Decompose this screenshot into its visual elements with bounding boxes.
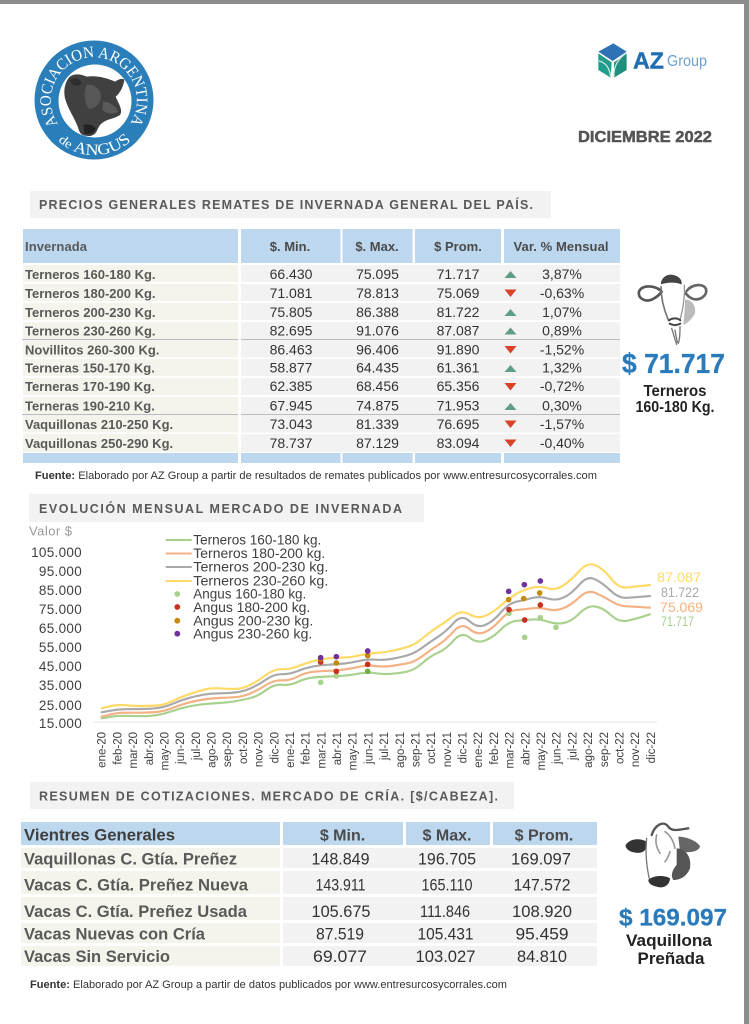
row: Vaquillonas 210-250: 73.043 <box>270 416 313 432</box>
table header: $. Min. <box>270 239 310 254</box>
heading: precios generales: PRECIOS GENERALES REMATES DE INVERNADA GENERAL DEL PAÍS. <box>39 197 533 212</box>
x axis labels: dic-22 <box>646 732 658 763</box>
x axis labels: jul-21 <box>379 732 391 761</box>
x axis labels: oct-21 <box>426 732 438 764</box>
x axis labels: may-20 <box>160 732 172 770</box>
legend: Terneros 160-180 kg. <box>193 532 321 548</box>
row: Terneros 200-230 <box>25 304 582 320</box>
row: Vaquillonas 250-290: 83.094 <box>437 435 480 451</box>
row: Terneras 170-190: Terneras 170-190 Kg. <box>25 379 155 394</box>
row: Terneros 230-260 <box>25 322 582 338</box>
row: Terneros 180-200: -0,63% <box>540 285 584 301</box>
x axis labels: mar-21 <box>316 732 328 768</box>
row: Vacas Nuevas con Cría: 105.431 <box>418 926 474 944</box>
row: Terneros 230-260: 82.695 <box>270 322 313 338</box>
callout: vaquillona price: Vaquillona <box>626 932 713 950</box>
row: Terneros 180-200: 75.069 <box>437 285 480 301</box>
x axis labels: feb-21 <box>301 732 313 765</box>
x axis labels: ene-20 <box>97 732 109 768</box>
row: Terneros 200-230: 1,07% <box>542 304 582 320</box>
row: Novillitos 260-300: Novillitos 260-300 Kg. <box>25 342 159 358</box>
line chart: monthly evolution <box>29 524 703 770</box>
callout: terneros price: $ 71.717 <box>622 348 725 379</box>
table header <box>23 229 620 263</box>
row: Terneras 150-170: 1,32% <box>542 360 582 376</box>
row: Vaquillonas C. Gtía. Preñez: Vaquillonas C. Gtía. Preñez <box>24 850 237 868</box>
row: Vacas Nuevas con Cría: 95.459 <box>516 926 568 944</box>
row: Vacas C. Gtía. Preñez Usada: 108.920 <box>512 903 572 921</box>
row: Terneros 160-180: Terneros 160-180 Kg. <box>25 267 156 282</box>
icon: calf head <box>639 275 706 344</box>
row: Novillitos 260-300: 91.890 <box>437 342 480 358</box>
x axis labels: dic-20 <box>269 732 281 763</box>
x axis labels: oct-22 <box>614 732 626 764</box>
row: Vacas Sin Servicio: 84.810 <box>517 948 567 966</box>
row: Vacas C. Gtía. Preñez Usada: Vacas C. Gtía. Preñez Usada <box>24 903 248 921</box>
row: Terneros 230-260: 87.087 <box>437 322 480 338</box>
table: vientres generales <box>21 822 597 966</box>
row: Terneras 170-190: 65.356 <box>437 378 480 394</box>
x axis labels: sep-21 <box>410 732 422 767</box>
row: Vaquillonas 250-290: 78.737 <box>270 435 313 451</box>
x axis labels: ago-21 <box>395 732 407 768</box>
row: Terneros 160-180: 66.430 <box>270 266 313 282</box>
end value labels: 87.087 <box>657 569 701 585</box>
row: Vacas Sin Servicio: Vacas Sin Servicio <box>24 948 170 966</box>
end value labels: 81.722 <box>661 584 699 600</box>
y axis labels: 45.000 <box>39 659 82 674</box>
row: Vacas Nuevas con Cría: 87.519 <box>316 926 364 944</box>
row: Terneros 160-180 <box>25 266 582 282</box>
source note 1: Fuente: Elaborado por AZ Group a partir de resultados de remates publicados por www.entresurcosycorrales.com <box>35 470 597 482</box>
row: Vacas C. Gtía. Preñez Nueva: 147.572 <box>514 876 570 894</box>
table header <box>21 822 597 845</box>
end value labels <box>657 569 703 629</box>
end value labels: 75.069 <box>660 599 703 615</box>
row: Terneros 200-230: 86.388 <box>356 304 399 320</box>
callout: terneros price: Terneros <box>644 383 706 400</box>
row: Vaquillonas C. Gtía. Preñez <box>21 848 597 868</box>
x axis labels: abr-21 <box>332 732 344 765</box>
legend: Angus 180-200 kg. <box>193 600 310 615</box>
row: Terneros 180-200 <box>25 285 584 301</box>
icon: AZ hexagon <box>598 43 627 78</box>
icon: black bull head <box>64 74 124 136</box>
legend: Angus 200-230 kg. <box>193 614 313 628</box>
end value labels: 71.717 <box>661 613 694 629</box>
legend: Angus 160-180 kg. <box>193 586 306 602</box>
data series and dots <box>102 564 650 718</box>
row: Vaquillonas 250-290 <box>25 435 584 451</box>
row: Vacas C. Gtía. Preñez Usada: 111.846 <box>420 903 470 921</box>
x axis labels: oct-20 <box>238 732 250 764</box>
row: Vaquillonas 250-290: 87.129 <box>356 435 399 451</box>
row: Terneras 170-190: 62.385 <box>270 378 313 394</box>
x axis labels: may-21 <box>348 732 360 770</box>
row: Vaquillonas 210-250 <box>25 416 584 432</box>
logo: AZ Group: AZ <box>633 48 664 74</box>
x axis labels: ene-21 <box>285 732 297 768</box>
row: Terneras 150-170: 58.877 <box>270 360 313 376</box>
table header: Invernada <box>25 239 88 254</box>
row: Vaquillonas C. Gtía. Preñez: 196.705 <box>418 850 476 868</box>
table header: Var. % Mensual <box>514 239 608 254</box>
x axis labels: abr-20 <box>144 732 156 765</box>
row: Terneras 190-210: 71.953 <box>437 398 480 414</box>
row: Terneras 190-210: 0,30% <box>542 398 582 414</box>
x axis labels: mar-22 <box>505 732 517 768</box>
x axis labels: jun-21 <box>363 732 375 765</box>
row: Terneras 150-170 <box>25 360 582 376</box>
logo: Asociación Argentina de Angus <box>34 40 154 160</box>
table header: $ Prom. <box>434 239 482 254</box>
x axis labels: jun-22 <box>552 732 564 765</box>
icon: cow head <box>626 824 700 887</box>
y axis labels: 15.000 <box>39 716 82 731</box>
y axis labels: 55.000 <box>39 640 82 655</box>
callout: vaquillona price <box>619 904 727 968</box>
y axis labels: 105.000 <box>31 545 82 560</box>
row: Novillitos 260-300: 96.406 <box>356 342 399 358</box>
table: invernada prices <box>22 229 620 463</box>
legend: Terneros 230-260 kg. <box>193 574 328 588</box>
x axis labels: nov-20 <box>254 732 266 767</box>
row: Terneras 170-190: -0,72% <box>540 378 584 394</box>
row: Vaquillonas C. Gtía. Preñez: 148.849 <box>312 850 370 868</box>
row: Vacas C. Gtía. Preñez Nueva: 165.110 <box>422 876 472 894</box>
row: Vaquillonas 250-290: -0,40% <box>540 435 584 451</box>
row: Terneros 200-230: 81.722 <box>437 304 480 320</box>
x axis labels: jul-22 <box>567 732 579 761</box>
heading: evolución mensual: EVOLUCIÓN MENSUAL MERCADO DE INVERNADA <box>39 501 402 516</box>
x axis labels: jun-20 <box>175 732 187 765</box>
callout: terneros price: 160-180 Kg. <box>636 399 714 416</box>
row: Terneras 170-190: 68.456 <box>356 378 399 394</box>
y axis labels: 85.000 <box>39 583 82 598</box>
row: Terneras 190-210 <box>25 398 582 414</box>
row: Terneras 170-190 <box>25 378 584 394</box>
row: Vaquillonas 210-250: 81.339 <box>356 416 399 432</box>
table header: $ Min. <box>320 828 365 844</box>
row backgrounds <box>22 265 620 452</box>
x axis labels: ago-22 <box>583 732 595 768</box>
y axis labels: 35.000 <box>39 678 82 693</box>
x axis labels: abr-22 <box>520 732 532 765</box>
row: Terneros 160-180: 75.095 <box>356 266 399 282</box>
table header: Vientres Generales <box>24 826 175 844</box>
table header: $ Max. <box>423 828 471 844</box>
row: Terneros 180-200: Terneros 180-200 Kg. <box>25 286 156 301</box>
y axis labels: 65.000 <box>39 621 82 636</box>
row: Vacas C. Gtía. Preñez Nueva: Vacas C. Gtía. Preñez Nueva <box>24 876 249 894</box>
x axis labels: feb-22 <box>489 732 501 765</box>
row: Terneros 230-260: 91.076 <box>356 322 399 338</box>
row: Terneros 160-180: 3,87% <box>542 266 582 282</box>
row: Vacas Nuevas con Cría <box>21 923 597 944</box>
x axis labels: ene-22 <box>473 732 485 768</box>
logo: AZ Group: Group <box>667 53 707 70</box>
legend: Terneros 180-200 kg. <box>193 546 325 561</box>
y axis labels: 95.000 <box>39 564 82 579</box>
row: Novillitos 260-300: 86.463 <box>270 342 313 358</box>
row: Terneras 190-210: 67.945 <box>270 398 313 414</box>
y axis title: Valor $ <box>29 524 73 538</box>
x axis labels: nov-21 <box>442 732 454 767</box>
legend: Angus 230-260 kg. <box>193 626 312 642</box>
row: Vacas Sin Servicio: 103.027 <box>416 948 476 966</box>
table footer band <box>23 453 620 463</box>
row: Terneras 190-210: 74.875 <box>356 398 399 414</box>
row: Terneras 150-170: 61.361 <box>437 360 480 376</box>
date heading: DICIEMBRE 2022 <box>578 129 712 146</box>
x axis labels: feb-20 <box>112 732 124 765</box>
x axis labels: nov-22 <box>630 732 642 767</box>
logo: Asociación Argentina de Angus: ASOCIACION ARGENTINA <box>40 46 148 125</box>
heading: precios generales <box>30 191 551 218</box>
row: Vacas C. Gtía. Preñez Usada: 105.675 <box>312 903 370 921</box>
y axis labels: 75.000 <box>39 602 82 617</box>
heading: resumen de cotizaciones <box>30 782 514 809</box>
row: Vaquillonas 210-250: Vaquillonas 210-250 Kg. <box>25 417 173 432</box>
source note 2: Fuente: Elaborado por AZ Group a partir de datos publicados por www.entresurcosycorrales.com <box>30 979 507 991</box>
x axis labels: dic-21 <box>458 732 470 763</box>
row: Terneros 200-230: 75.805 <box>270 304 313 320</box>
row: Terneros 200-230: Terneros 200-230 Kg. <box>25 305 156 320</box>
row: Terneras 190-210: Terneras 190-210 Kg. <box>25 398 155 414</box>
row: Vacas C. Gtía. Preñez Usada <box>21 897 597 921</box>
logo: AZ Group <box>598 43 707 78</box>
callout: terneros price <box>622 348 725 416</box>
x axis labels <box>97 732 658 770</box>
legend: Terneros 200-230 kg. <box>193 560 328 574</box>
row: Vacas Sin Servicio: 69.077 <box>313 948 367 966</box>
y axis labels <box>31 545 82 731</box>
callout: vaquillona price: Preñada <box>638 950 705 968</box>
row: Terneras 150-170: 64.435 <box>356 360 399 376</box>
heading: resumen de cotizaciones: RESUMEN DE COTIZACIONES. MERCADO DE CRÍA. [$/CABEZA]. <box>39 788 498 804</box>
row: Terneros 180-200: 71.081 <box>270 285 313 301</box>
row: Terneros 180-200: 78.813 <box>356 285 399 301</box>
row: Vacas C. Gtía. Preñez Nueva <box>21 871 597 894</box>
x axis labels: sep-22 <box>599 732 611 767</box>
x axis labels: mar-20 <box>128 732 140 768</box>
row: Vaquillonas C. Gtía. Preñez: 169.097 <box>511 850 571 868</box>
row: Terneros 230-260: 0,89% <box>542 322 582 338</box>
row: Terneras 150-170: Terneras 150-170 Kg. <box>25 360 155 376</box>
row: Novillitos 260-300 <box>25 342 584 358</box>
row: Vacas Sin Servicio <box>21 946 597 966</box>
legend <box>166 532 328 642</box>
x axis labels: jul-20 <box>191 732 203 761</box>
table header: $. Max. <box>355 239 399 254</box>
row: Novillitos 260-300: -1,52% <box>540 342 584 358</box>
x axis labels: may-22 <box>536 732 548 770</box>
y axis labels: 25.000 <box>39 698 82 713</box>
row: Vaquillonas 250-290: Vaquillonas 250-290 Kg. <box>25 436 173 451</box>
row: Vaquillonas 210-250: 76.695 <box>437 416 480 432</box>
row: Vaquillonas 210-250: -1,57% <box>540 416 584 432</box>
row: Terneros 160-180: 71.717 <box>437 266 480 282</box>
callout: vaquillona price: $ 169.097 <box>619 904 727 932</box>
table header: $ Prom. <box>515 828 573 844</box>
row: Vacas C. Gtía. Preñez Nueva: 143.911 <box>316 876 366 894</box>
x axis labels: sep-20 <box>222 732 234 767</box>
row: Vacas Nuevas con Cría: Vacas Nuevas con Cría <box>24 926 206 944</box>
heading: evolución mensual <box>29 494 424 522</box>
logo: Asociación Argentina de Angus: de ANGUS <box>59 134 130 156</box>
x axis labels: ago-20 <box>206 732 218 768</box>
row: Terneros 230-260: Terneros 230-260 Kg. <box>25 324 156 338</box>
